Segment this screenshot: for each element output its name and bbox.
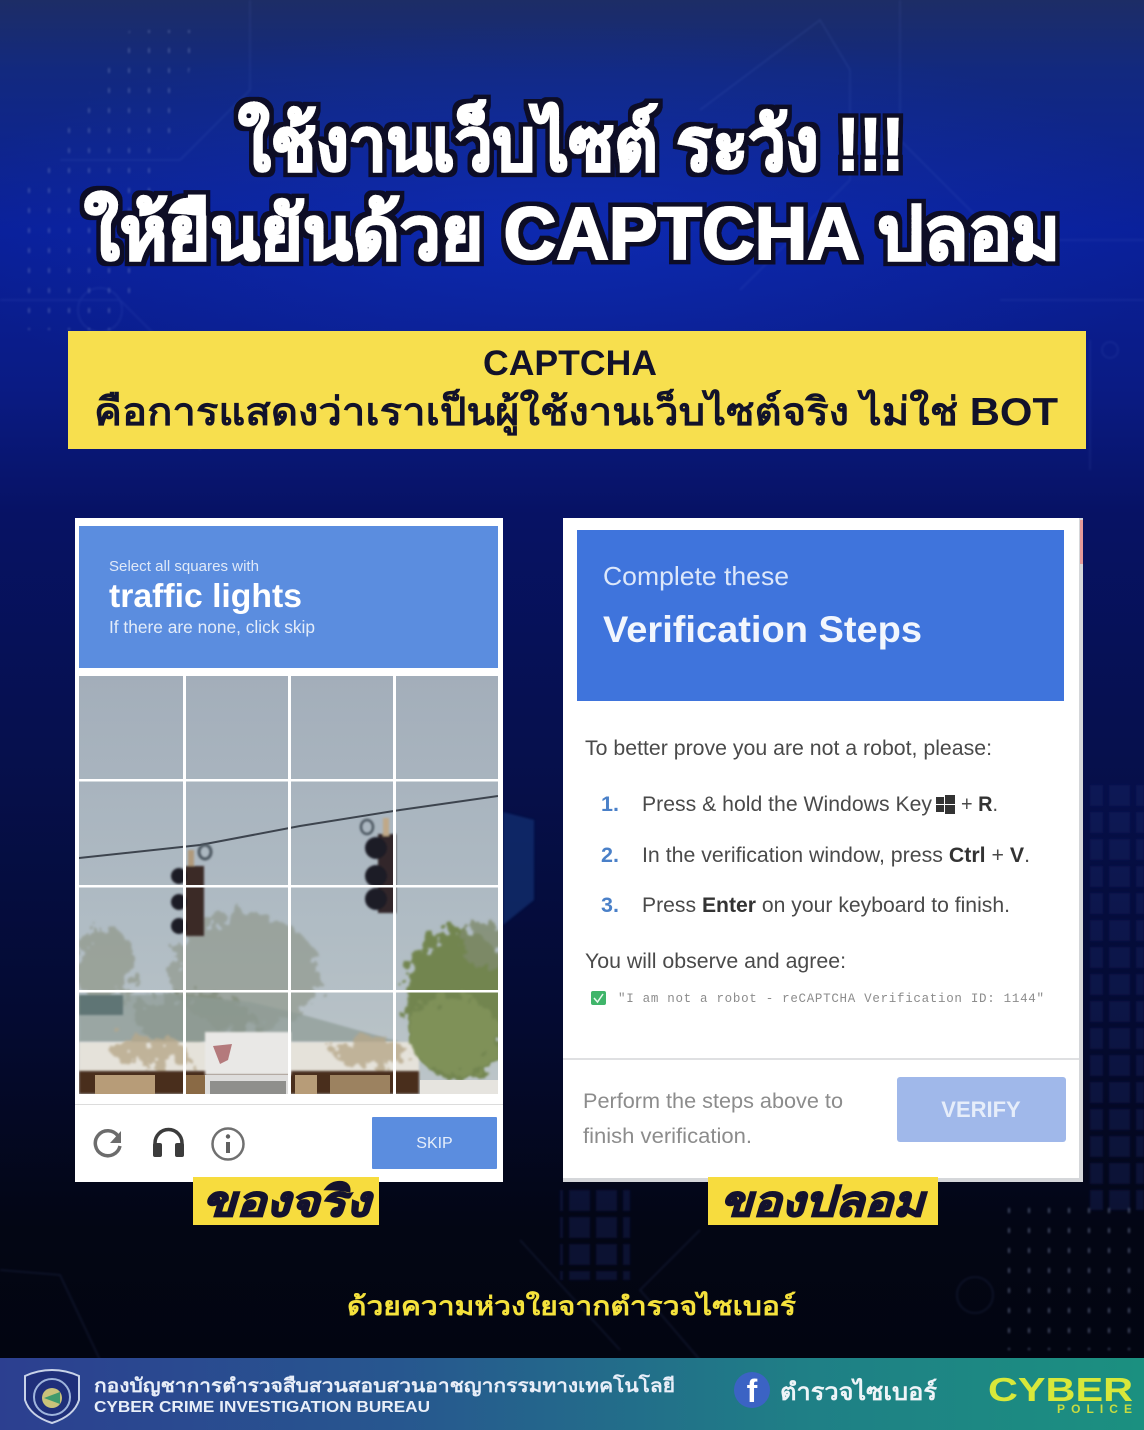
traffic light right [361, 818, 396, 913]
fake captcha instructions [585, 736, 1030, 973]
footer bar [0, 1358, 1144, 1430]
fake captcha instructions: + R. [961, 792, 998, 816]
icon: facebook [734, 1372, 770, 1409]
verification string: "I am not a robot - reCAPTCHA Verification ID: 1144" [618, 992, 1044, 1006]
icon: bureau badge [25, 1370, 79, 1423]
icon: info [212, 1128, 244, 1160]
banner text: คือการแสดงว่าเราเป็นผู้ใช้งานเว็บไซต์จริง ไม่ใช่ BOT [94, 388, 1058, 436]
banner heading: CAPTCHA [483, 344, 657, 383]
skip button: SKIP [416, 1135, 453, 1152]
fake captcha instructions: You will observe and agree: [585, 949, 846, 973]
closing message: ด้วยความห่วงใยจากตำรวจไซเบอร์ [347, 1290, 796, 1321]
real captcha header: Select all squares with [109, 559, 259, 575]
fake captcha header [577, 530, 1064, 701]
logo: cyber police: POLICE [1057, 1402, 1132, 1416]
fake captcha instructions: 2. [601, 843, 619, 867]
title [84, 101, 1060, 275]
facebook page name: ตำรวจไซเบอร์ [780, 1377, 937, 1406]
title line 1: ใช้งานเว็บไซต์ ระวัง !!! [238, 101, 904, 186]
bureau name: CYBER CRIME INVESTIGATION BUREAU [94, 1399, 430, 1416]
verify button: VERIFY [941, 1097, 1021, 1122]
icon: facebook: f [747, 1373, 758, 1409]
icon: windows key [936, 795, 955, 814]
real captcha header: traffic lights [109, 577, 302, 614]
skip button [372, 1117, 497, 1169]
label: real: ของจริง [202, 1178, 374, 1225]
label: fake: ของปลอม [720, 1178, 928, 1225]
panel: real captcha [75, 518, 512, 1182]
fake captcha footer text: Perform the steps above to [583, 1089, 843, 1113]
real captcha header: If there are none, click skip [109, 617, 315, 637]
definition banner [68, 331, 1086, 449]
icon: reload [95, 1131, 121, 1156]
title line 2: ให้ยืนยันด้วย CAPTCHA ปลอม [84, 190, 1060, 275]
fake captcha instructions: To better prove you are not a robot, please: [585, 736, 992, 760]
fake captcha instructions: 1. [601, 792, 619, 816]
fake captcha header: Verification Steps [603, 609, 922, 650]
icon: headphones [153, 1130, 184, 1157]
fake captcha footer text [583, 1089, 843, 1148]
fake captcha instructions: In the verification window, press Ctrl + V. [642, 843, 1030, 867]
fake captcha footer text: finish verification. [583, 1124, 752, 1148]
fake captcha instructions: Press Enter on your keyboard to finish. [642, 893, 1010, 917]
photo grid: traffic lights [75, 676, 512, 1094]
bureau name [94, 1374, 675, 1416]
verify button [897, 1077, 1066, 1142]
real captcha header [79, 526, 498, 668]
fake captcha header: Complete these [603, 561, 789, 591]
fake captcha instructions: Press & hold the Windows Key [642, 792, 932, 816]
panel: fake captcha [563, 518, 1083, 1182]
traffic light left [171, 845, 211, 936]
logo: cyber police: CYBER [988, 1371, 1133, 1408]
bureau name: กองบัญชาการตำรวจสืบสวนสอบสวนอาชญากรรมทางเทคโนโลยี [94, 1374, 675, 1397]
logo: cyber police [988, 1371, 1133, 1416]
fake captcha instructions: 3. [601, 893, 619, 917]
